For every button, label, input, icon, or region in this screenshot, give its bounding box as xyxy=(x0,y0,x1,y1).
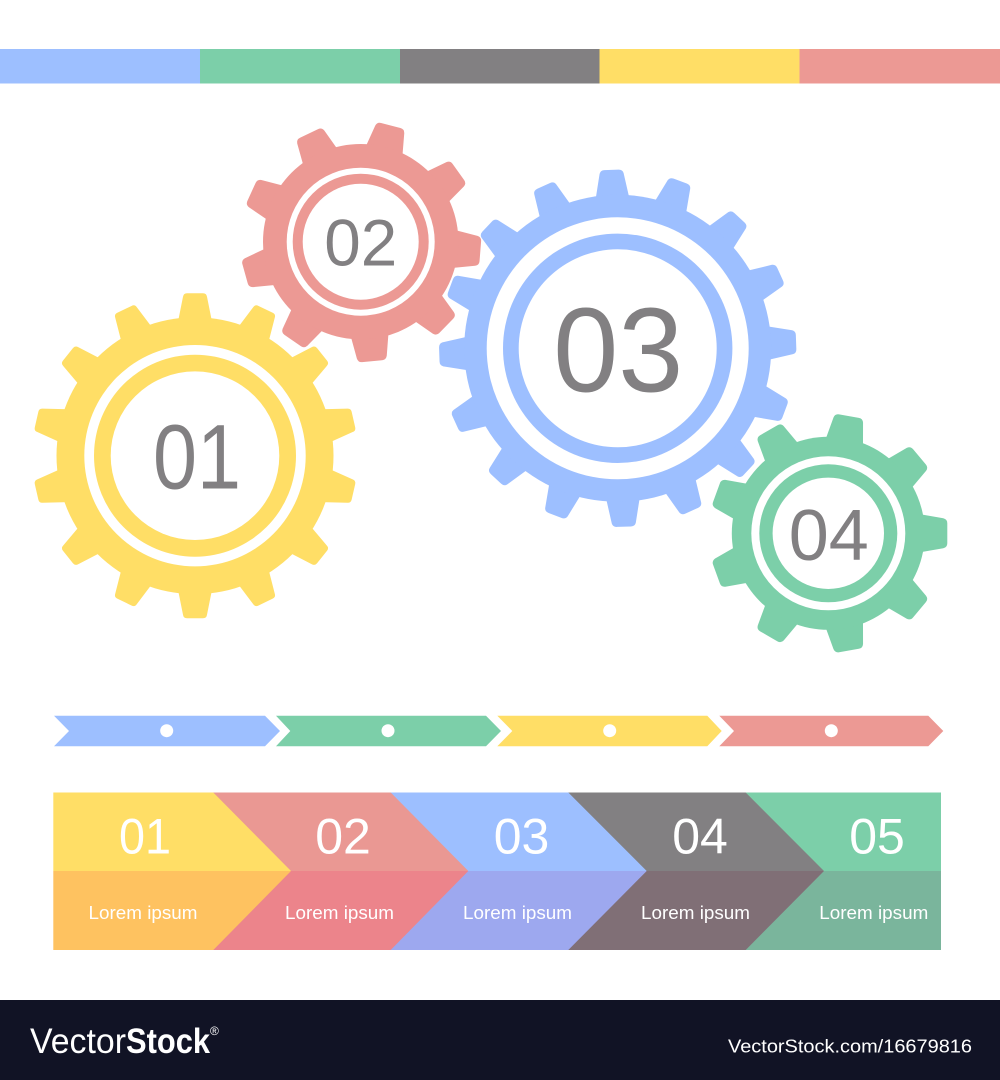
footer image id: VectorStock.com/16679816 xyxy=(728,1036,972,1056)
gear 04 teeth xyxy=(710,413,947,654)
arrow segment: yellow xyxy=(497,716,722,746)
step 01 yellow: 01 xyxy=(119,809,171,865)
footer logo: VectorStock xyxy=(30,1022,221,1061)
gear 02 number: 02 xyxy=(324,206,397,280)
step 03 blue: 03 xyxy=(494,809,549,865)
step 02 red: 02 xyxy=(315,809,371,865)
step 04 gray: Lorem ipsum xyxy=(641,902,750,923)
gear 01 number: 01 xyxy=(153,407,241,509)
step 02 red: Lorem ipsum xyxy=(285,902,394,923)
gear 01 teeth xyxy=(33,293,357,618)
step 01 yellow: Lorem ipsum xyxy=(88,902,198,923)
footer band xyxy=(0,1000,1000,1080)
step 01 yellow xyxy=(53,792,291,950)
gear 03 blue xyxy=(439,169,797,527)
gear 03 teeth xyxy=(439,169,797,527)
gear 03 number: 03 xyxy=(553,283,683,417)
footer logo: ® xyxy=(210,1024,219,1038)
gear 01 yellow xyxy=(33,293,357,618)
step 03 blue xyxy=(320,792,647,950)
gear 02 body and rings xyxy=(263,144,458,339)
step 05 green xyxy=(700,792,941,950)
gear 01 body and rings xyxy=(56,317,334,594)
gear 04 body and rings xyxy=(732,437,925,630)
arrow segment: red xyxy=(719,716,943,746)
arrow segment: green xyxy=(276,716,501,746)
step 03 blue: Lorem ipsum xyxy=(463,902,572,923)
gear 02 red xyxy=(240,121,482,363)
five step chevron table xyxy=(53,792,941,950)
step 04 gray xyxy=(500,792,824,950)
gear 04 green xyxy=(710,413,947,654)
gear 04 number: 04 xyxy=(789,496,869,576)
step 02 red xyxy=(180,792,468,950)
arrow segment: blue xyxy=(54,716,280,746)
arrow strip xyxy=(54,716,943,746)
step 04 gray: 04 xyxy=(672,809,728,865)
gear 03 body and rings xyxy=(464,195,771,502)
top colour bar xyxy=(0,49,1000,84)
step 05 green: Lorem ipsum xyxy=(819,902,928,923)
gear 02 teeth xyxy=(240,121,482,363)
step 05 green: 05 xyxy=(849,809,905,865)
